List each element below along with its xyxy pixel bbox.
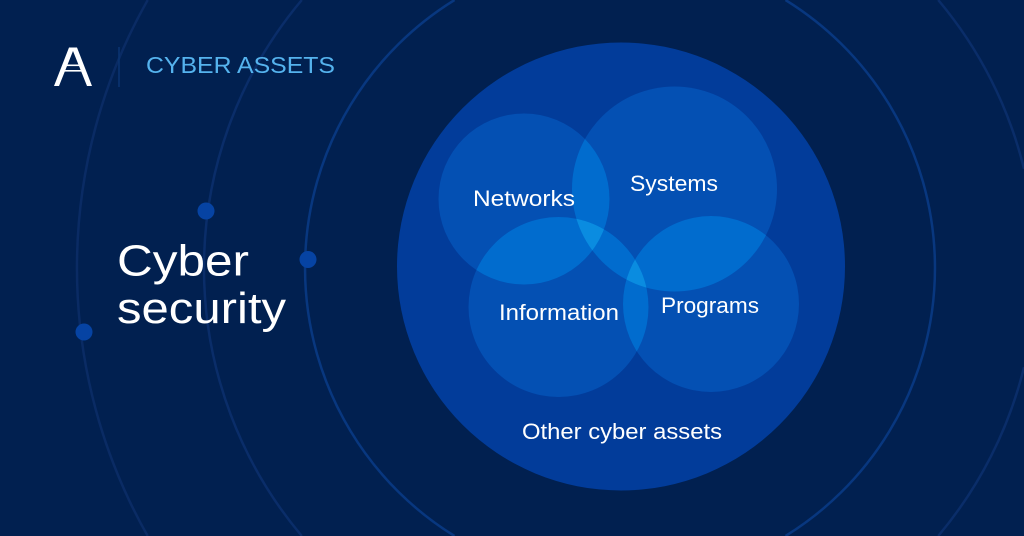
circle: networks	[438, 114, 610, 284]
overlaps between circles	[476, 140, 766, 352]
circle: systems	[572, 86, 777, 292]
label: other cyber assets: Other cyber assets	[522, 419, 722, 444]
label: information: Information	[499, 300, 619, 325]
circle: programs	[623, 216, 799, 392]
title: cyber security	[117, 236, 286, 333]
title: cyber security: security	[117, 284, 286, 333]
venn diagram	[397, 42, 845, 490]
label: systems: Systems	[630, 171, 718, 196]
label: networks: Networks	[473, 186, 575, 211]
outer circle: other cyber assets	[397, 42, 845, 490]
label: programs: Programs	[661, 293, 759, 318]
logo	[54, 48, 92, 86]
heading: cyber assets: CYBER ASSETS	[146, 52, 335, 78]
title: cyber security: Cyber	[117, 236, 249, 286]
circle: information	[468, 217, 648, 397]
node dots on rings	[76, 202, 316, 340]
